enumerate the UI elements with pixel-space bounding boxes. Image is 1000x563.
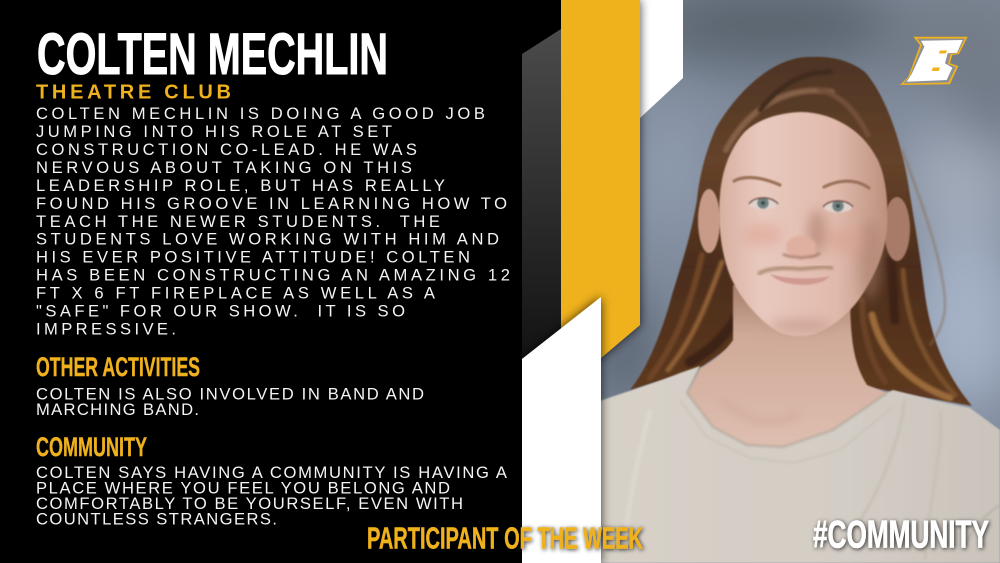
student portrait photo — [595, 0, 1000, 563]
shirt — [600, 366, 1000, 563]
white top chevron — [640, 0, 683, 118]
back hair mass — [630, 57, 972, 406]
participant of the week banner: PARTICIPANT OF THE WEEK — [367, 520, 643, 556]
club description text — [36, 104, 510, 338]
eyebrows — [734, 178, 869, 188]
hair highlights — [650, 72, 955, 398]
other activities text: MARCHING BAND. — [36, 400, 199, 419]
white lower chevron — [522, 297, 601, 563]
club description text: NERVOUS ABOUT TAKING ON THIS — [36, 158, 412, 177]
other activities text — [36, 384, 424, 419]
community text — [36, 463, 508, 528]
club description text: STUDENTS LOVE WORKING WITH HIM AND — [36, 230, 499, 249]
community text: COLTEN SAYS HAVING A COMMUNITY IS HAVING A — [36, 463, 508, 482]
club description text: IMPRESSIVE. — [36, 320, 176, 338]
club description text: COLTEN MECHLIN IS DOING A GOOD JOB — [36, 104, 485, 123]
club description text: HIS EVER POSITIVE ATTITUDE! COLTEN — [36, 248, 470, 267]
club description text: TEACH THE NEWER STUDENTS. THE — [36, 212, 440, 231]
community text: COMFORTABLY TO BE YOURSELF, EVEN WITH — [36, 494, 463, 513]
club description text: FT X 6 FT FIREPLACE AS WELL AS A — [36, 284, 436, 303]
black mask keeping text panel clean — [0, 0, 522, 563]
neck — [684, 285, 890, 450]
community heading: COMMUNITY — [36, 432, 147, 462]
community text: PLACE WHERE YOU FEEL YOU BELONG AND — [36, 479, 450, 498]
mouth — [770, 274, 830, 285]
community text: COUNTLESS STRANGERS. — [36, 510, 277, 528]
other activities text: COLTEN IS ALSO INVOLVED IN BAND AND — [36, 384, 424, 404]
club description text: HAS BEEN CONSTRUCTING AN AMAZING 12 — [36, 266, 510, 285]
dark grey chevron band — [522, 29, 561, 365]
club description text: "SAFE" FOR OUR SHOW. IT IS SO — [36, 302, 405, 320]
other activities heading: OTHER ACTIVITIES — [36, 352, 200, 382]
club description text: CONSTRUCTION CO-LEAD. HE WAS — [36, 140, 417, 159]
club subheading: THEATRE CLUB — [36, 82, 231, 104]
facial shading — [742, 210, 882, 332]
nose — [783, 236, 820, 258]
name heading: COLTEN MECHLIN — [37, 22, 388, 87]
club description text: JUMPING INTO HIS ROLE AT SET — [36, 122, 392, 141]
face — [719, 112, 888, 336]
eyes — [749, 197, 853, 212]
ears — [698, 189, 910, 261]
club description text: FOUND HIS GROOVE IN LEARNING HOW TO — [36, 194, 507, 213]
club description text: LEADERSHIP ROLE, BUT HAS REALLY — [36, 176, 445, 195]
moustache — [758, 267, 833, 274]
gold vertical chevron band — [561, 0, 640, 358]
neck collarbone shading — [740, 414, 794, 423]
icon: school E logo — [900, 37, 968, 85]
shirt collar seam and folds — [686, 369, 999, 542]
